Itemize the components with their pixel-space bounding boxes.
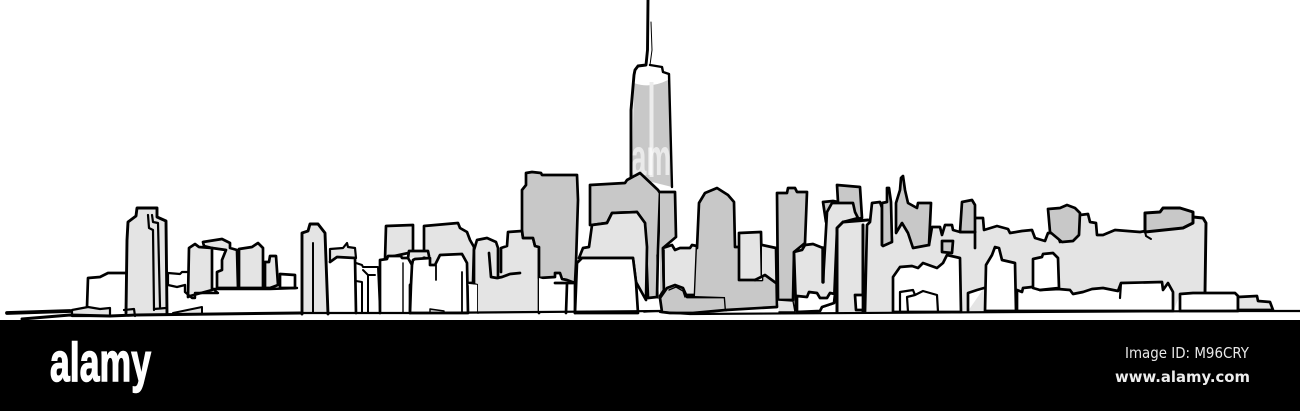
midtown low blocks [330, 223, 478, 313]
tall twin-setback tower [124, 208, 167, 316]
large gray block [522, 172, 578, 313]
low cluster beside tower [110, 239, 300, 316]
left waterfront buildings [7, 273, 125, 319]
alamy logo: alamy [50, 331, 151, 393]
light block and dome [660, 245, 726, 313]
skyline drawing [7, 0, 1300, 319]
white foreground buildings right [893, 247, 1273, 312]
website url: www.alamy.com [1115, 368, 1250, 386]
image ID: Image ID: M96CRY [1125, 344, 1250, 362]
light gray twin blocks [474, 231, 539, 313]
watermark on tower: am [631, 129, 671, 187]
gray towers and gothic spire [882, 176, 1193, 253]
ground line [300, 311, 1300, 314]
round-top gray tower [695, 188, 777, 310]
wide light background block [865, 202, 1206, 312]
narrow tower [302, 224, 328, 314]
gray tower center right [777, 185, 868, 312]
stepped gray base with light atrium [575, 173, 676, 313]
black footer band [0, 320, 1300, 411]
One World Trade tower [631, 0, 672, 187]
